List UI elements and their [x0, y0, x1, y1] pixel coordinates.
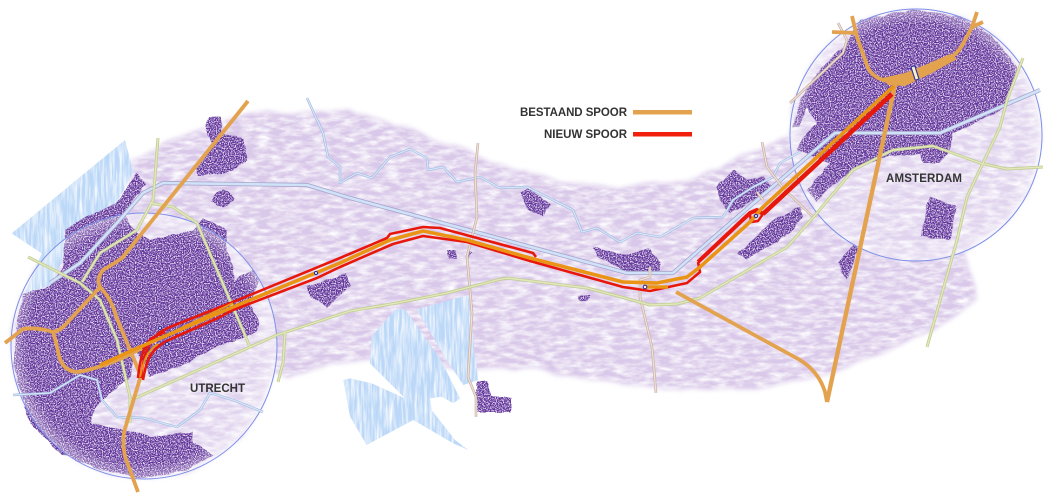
legend: existing rail: BESTAAND SPOOR — [520, 107, 628, 119]
new rail: red tracks — [138, 94, 892, 380]
legend: new rail: NIEUW SPOOR — [544, 129, 628, 141]
legend — [520, 107, 692, 141]
city area: Amsterdam — [717, 9, 1017, 280]
canals outline and fill — [13, 90, 1040, 427]
villages along the route — [447, 188, 660, 301]
legend: existing rail — [520, 107, 692, 119]
label: Amsterdam: AMSTERDAM — [886, 173, 962, 185]
legend: new rail — [544, 129, 692, 141]
existing rail: main track through corridor — [100, 86, 894, 377]
beige roads — [467, 23, 847, 417]
circle rim: Amsterdam — [790, 9, 1042, 261]
label: Utrecht: UTRECHT — [190, 383, 245, 395]
water: central lakes — [343, 295, 478, 450]
city area: Utrecht — [13, 117, 350, 478]
village south of lakes — [477, 381, 511, 412]
circle rim: Utrecht — [11, 213, 277, 479]
water: lake top left — [12, 140, 133, 293]
green roads — [28, 58, 1043, 423]
station markers — [158, 66, 919, 345]
